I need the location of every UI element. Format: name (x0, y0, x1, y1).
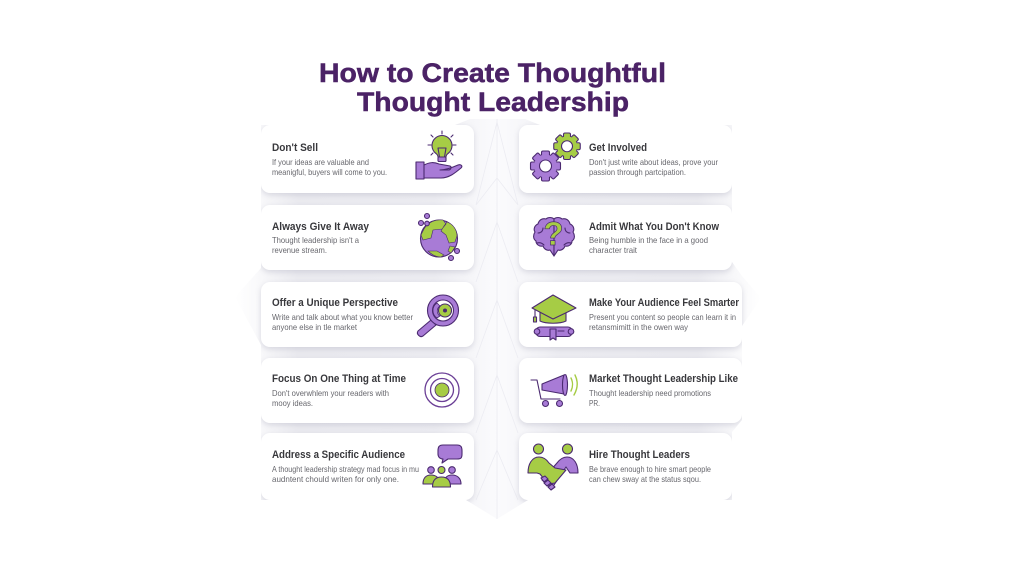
panel: Make Your Audience Feel Smarter: Present you content so people can learn it in (589, 312, 736, 322)
panel: Admit What You Don't Know: Being humble in the face in a good (589, 235, 708, 245)
icon: audience with speech bubble (423, 445, 462, 487)
panel: Get Involved: Get Involved (589, 142, 647, 154)
panel: Don't Sell: meanigful, buyers will come to you. (272, 167, 387, 177)
panel: Get Involved: passion through partcipation. (589, 167, 686, 177)
icon: graduation cap and diploma (532, 295, 576, 340)
icon: brain with question mark: ? (543, 215, 564, 252)
panel: Make Your Audience Feel Smarter (519, 282, 742, 347)
title: Thought Leadership (357, 87, 629, 117)
title (319, 58, 666, 117)
panel: Market Thought Leadership Like (519, 358, 742, 423)
panel: Don't Sell: If your ideas are valuable and (272, 157, 369, 167)
panel: Offer a Unique Perspective: Write and talk about what you know better (272, 312, 413, 322)
panel: Hire Thought Leaders (519, 433, 732, 500)
panel: Market Thought Leadership Like: Market Thought Leadership Like (589, 373, 738, 385)
background: faceted star shape (235, 119, 761, 519)
panel: Focus On One Thing at Time: Don't overwhlem your readers with (272, 388, 389, 398)
title: How to Create Thoughtful (319, 58, 666, 88)
panel: Address a Specific Audience: A thought leadership strategy mad focus in mu (272, 464, 419, 474)
panel: Address a Specific Audience: audntent chould writen for only one. (272, 474, 399, 484)
panel: Offer a Unique Perspective: Offer a Unique Perspective (272, 297, 398, 309)
panel: Don't Sell (261, 125, 474, 193)
panel: Always Give It Away (261, 205, 474, 270)
icon: brain with question mark (534, 215, 574, 256)
panel: Make Your Audience Feel Smarter: retansmimitt in the owen way (589, 322, 689, 332)
panel: Admit What You Don't Know: character trait (589, 245, 638, 255)
icon: magnifying glass (417, 295, 458, 337)
panel: Hire Thought Leaders: can chew sway at the status sqou. (589, 474, 701, 484)
panel: Address a Specific Audience (261, 433, 474, 500)
panel: Get Involved (519, 125, 732, 193)
panel: Admit What You Don't Know (519, 205, 732, 270)
panel: Focus On One Thing at Time: Focus On One Thing at Time (272, 373, 406, 385)
panel: Offer a Unique Perspective: anyone else in tle market (272, 322, 358, 332)
panel: Get Involved: Don't just write about ideas, prove your (589, 157, 718, 167)
panel: Always Give It Away: Thought leadership isn't a (272, 235, 359, 245)
panel: Always Give It Away: Always Give It Away (272, 221, 369, 233)
panel: Make Your Audience Feel Smarter: Make Your Audience Feel Smarter (589, 297, 740, 309)
panel: Offer a Unique Perspective (261, 282, 474, 347)
panel: Focus On One Thing at Time: mooy ideas. (272, 398, 313, 408)
panel: Admit What You Don't Know: Admit What You Don't Know (589, 221, 720, 233)
panel: Don't Sell: Don't Sell (272, 142, 318, 154)
panel: Hire Thought Leaders: Hire Thought Leaders (589, 449, 690, 461)
panel: Focus On One Thing at Time (261, 358, 474, 423)
panel: Address a Specific Audience: Address a Specific Audience (272, 449, 405, 461)
icon: light bulb over hand (416, 131, 462, 179)
icon: handshake (528, 444, 578, 490)
icon: globe (418, 214, 460, 260)
icon: megaphone in cart (531, 374, 577, 406)
icon: target (425, 373, 459, 407)
panel: Market Thought Leadership Like: PR. (589, 398, 600, 408)
panel: Market Thought Leadership Like: Thought leadership need promotions (589, 388, 711, 398)
panel: Always Give It Away: revenue stream. (272, 245, 327, 255)
panel: Hire Thought Leaders: Be brave enough to hire smart people (589, 464, 711, 474)
icon: gears (530, 133, 580, 181)
